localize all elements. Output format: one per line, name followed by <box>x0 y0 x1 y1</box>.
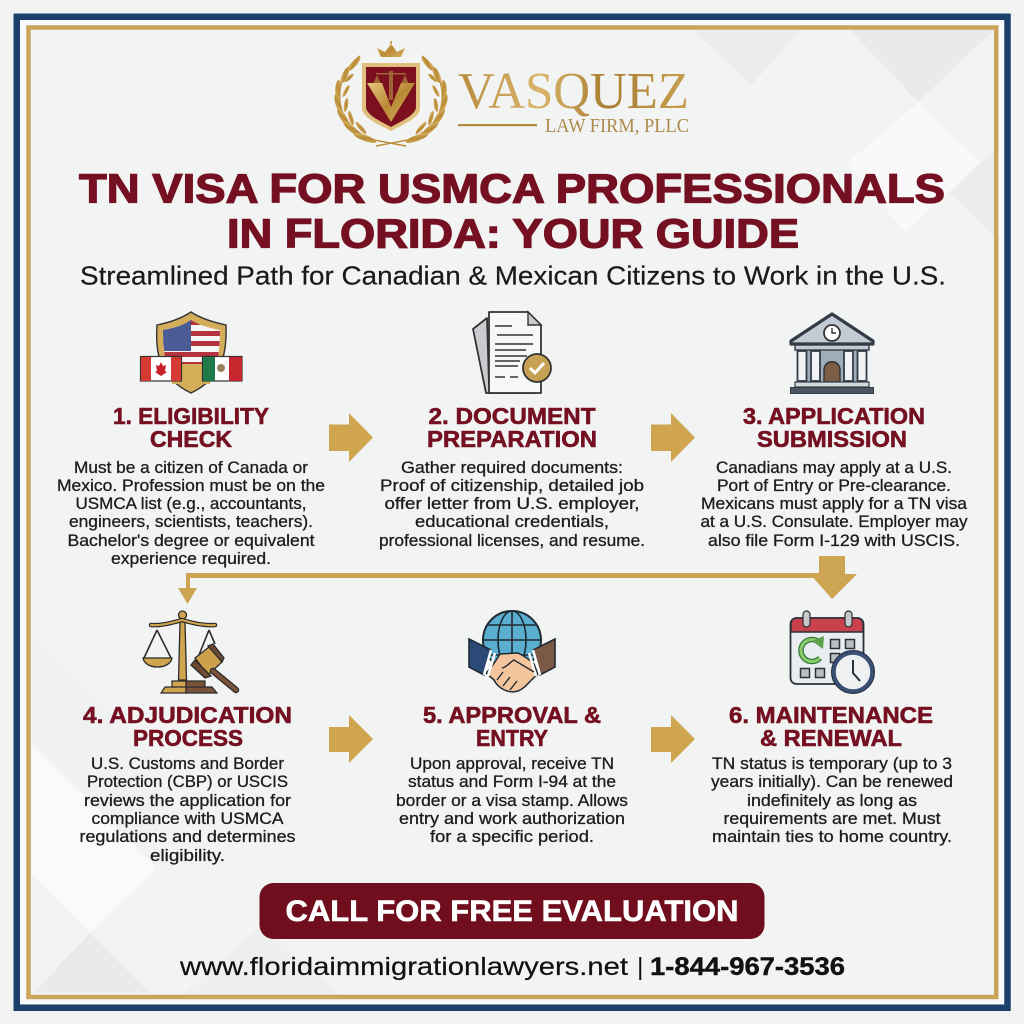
step 6 text: indefinitely as long as <box>747 792 917 810</box>
icon: shield with US, Canada and Mexico flags <box>140 312 242 393</box>
step 1 heading <box>113 403 269 452</box>
footer contact line: 1-844-967-3536 <box>650 953 845 981</box>
step 1 text: Must be a citizen of Canada or <box>74 459 309 477</box>
step 5 heading <box>423 702 601 751</box>
call to action button: CALL FOR FREE EVALUATION <box>286 895 738 928</box>
step 6 heading <box>729 702 933 751</box>
step 5 heading: 5. APPROVAL & <box>423 702 601 728</box>
step 3 text: Port of Entry or Pre-clearance. <box>717 477 951 495</box>
step 6 text <box>711 755 953 846</box>
step 5 text: status and Form I-94 at the <box>408 773 616 791</box>
step 3 text: Canadians may apply at a U.S. <box>716 459 952 477</box>
step 6 heading: & RENEWAL <box>760 725 902 751</box>
step 6 text: maintain ties to home country. <box>712 828 952 846</box>
step 6 heading: 6. MAINTENANCE <box>729 702 933 728</box>
step 2 text: offer letter from U.S. employer, <box>384 495 640 513</box>
step 1 text: experience required. <box>111 550 271 568</box>
step 5 text: entry and work authorization <box>399 810 625 828</box>
step 2 heading: PREPARATION <box>427 426 597 452</box>
logo <box>333 41 689 146</box>
icon: calendar with clock <box>790 611 874 694</box>
arrow: step 4 to 5 <box>329 715 373 763</box>
step 1 heading: 1. ELIGIBILITY <box>113 403 269 429</box>
step 1 text: engineers, scientists, teachers). <box>69 513 313 531</box>
panel: step 1 eligibility check <box>57 312 325 568</box>
arrow: step 5 to 6 <box>651 715 695 763</box>
step 4 text <box>80 755 296 865</box>
icon: globe with handshake <box>469 611 555 692</box>
step 4 heading <box>83 702 292 751</box>
step 6 text: years initially). Can be renewed <box>711 773 953 791</box>
step 1 text: Bachelor's degree or equivalent <box>68 532 315 550</box>
step 1 text: Mexico. Profession must be on the <box>57 477 325 495</box>
step 4 text: reviews the application for <box>84 792 292 810</box>
shield <box>362 63 420 131</box>
icon: courthouse <box>790 314 874 394</box>
step 3 text: Mexicans must apply for a TN visa <box>701 495 968 513</box>
step 2 text: Gather required documents: <box>401 459 623 477</box>
subtitle: Streamlined Path for Canadian & Mexican Citizens to Work in the U.S. <box>80 260 946 290</box>
call to action button <box>260 883 764 939</box>
logo rule <box>458 124 537 126</box>
icon: scales of justice and gavel <box>143 611 236 693</box>
step 3 text: also file Form I-129 with USCIS. <box>708 532 960 550</box>
step 6 text: requirements are met. Must <box>724 810 941 828</box>
step 4 text: compliance with USMCA <box>92 810 284 828</box>
step 2 text <box>379 459 645 550</box>
step 4 text: regulations and determines <box>80 828 296 846</box>
step 2 heading: 2. DOCUMENT <box>428 403 596 429</box>
step 3 text <box>700 459 968 550</box>
step 1 heading: CHECK <box>150 426 232 452</box>
footer contact line: | <box>637 953 644 981</box>
step 2 text: educational credentials, <box>415 513 609 531</box>
flag: Mexico <box>202 356 242 381</box>
step 5 text: Upon approval, receive TN <box>410 755 614 773</box>
panel: step 4 adjudication process <box>80 611 296 865</box>
crown <box>377 41 405 57</box>
arrow: step 2 to 3 <box>651 413 695 462</box>
step 4 text: eligibility. <box>150 847 225 865</box>
title <box>79 166 945 256</box>
step 4 text: Protection (CBP) or USCIS <box>87 773 288 791</box>
step 3 text: at a U.S. Consulate. Employer may <box>700 513 968 531</box>
icon: documents with check badge <box>473 312 551 393</box>
panel: step 2 document preparation <box>379 312 645 550</box>
title: IN FLORIDA: YOUR GUIDE <box>227 210 799 256</box>
step 3 heading <box>743 403 925 452</box>
step 2 text: Proof of citizenship, detailed job <box>380 477 644 495</box>
step 4 text: U.S. Customs and Border <box>91 755 285 773</box>
step 5 heading: ENTRY <box>476 725 548 751</box>
logo emblem: wreath, shield and crown <box>333 41 449 146</box>
step 3 heading: SUBMISSION <box>757 426 907 452</box>
step 5 text: border or a visa stamp. Allows <box>396 792 628 810</box>
step 2 text: professional licenses, and resume. <box>379 532 645 550</box>
footer contact line <box>179 953 845 981</box>
step 1 text <box>57 459 325 568</box>
step 1 text: USMCA list (e.g., accountants, <box>76 495 306 513</box>
flag: Canada <box>140 356 182 381</box>
panel: step 5 approval and entry <box>396 611 628 846</box>
laurel wreath <box>333 56 449 146</box>
arrow: connector from step 3 to step 4 <box>178 556 857 604</box>
step 6 text: TN status is temporary (up to 3 <box>712 755 952 773</box>
step 5 text <box>396 755 628 846</box>
step 4 heading: 4. ADJUDICATION <box>83 702 292 728</box>
logo wordmark: VASQUEZ <box>458 63 689 120</box>
panel: step 6 maintenance and renewal <box>711 611 953 846</box>
step 3 heading: 3. APPLICATION <box>743 403 925 429</box>
title: TN VISA FOR USMCA PROFESSIONALS <box>79 166 945 212</box>
step 2 heading <box>427 403 597 452</box>
logo subtitle: LAW FIRM, PLLC <box>545 115 689 137</box>
step 4 heading: PROCESS <box>133 725 243 751</box>
footer contact line: www.floridaimmigrationlawyers.net <box>179 953 628 981</box>
step 5 text: for a specific period. <box>430 828 594 846</box>
arrow: step 1 to 2 <box>329 413 373 462</box>
panel: step 3 application submission <box>700 314 968 550</box>
